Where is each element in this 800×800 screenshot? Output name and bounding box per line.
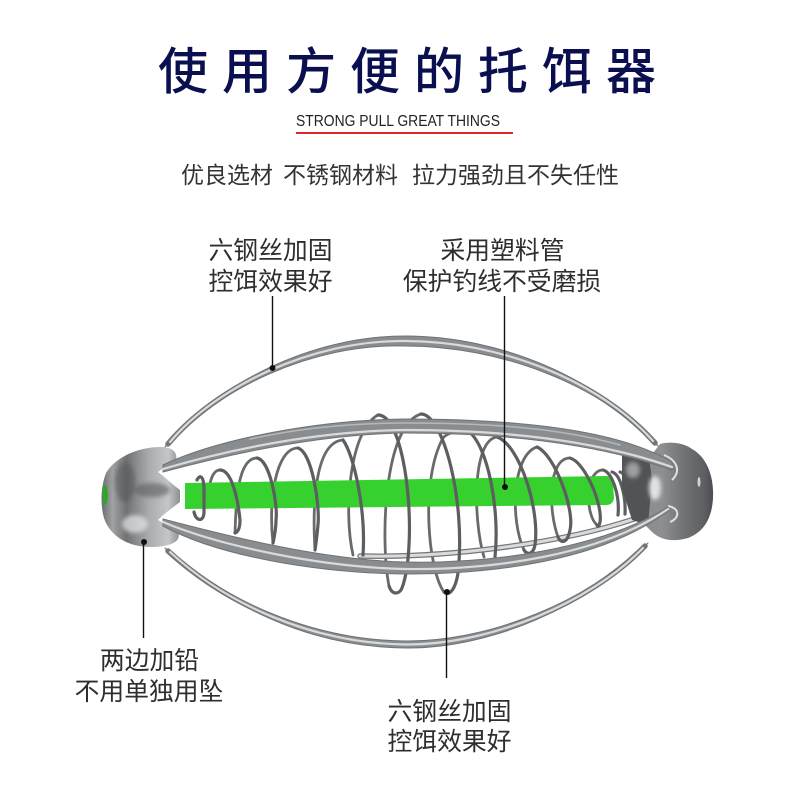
- callout: plastic tube: [403, 237, 601, 490]
- callout: plastic tube: 采用塑料管: [440, 237, 564, 265]
- subtitle: STRONG PULL GREAT THINGS: STRONG PULL GREAT THINGS: [296, 113, 500, 130]
- callout: plastic tube: 保护钓线不受磨损: [403, 268, 601, 296]
- callout: lead ends: 不用单独用坠: [75, 678, 223, 706]
- back lower wire: [360, 517, 640, 556]
- callout: lead ends: [75, 539, 223, 706]
- callout: top left: [208, 237, 332, 371]
- tagline: 拉力强劲且不失任性: [412, 162, 619, 188]
- green plastic tube: [185, 476, 614, 509]
- tagline: 不锈钢材料: [283, 162, 398, 188]
- callout: top left: 六钢丝加固: [208, 237, 332, 265]
- callout: bottom: [388, 589, 512, 756]
- tagline: 优良选材: [181, 162, 273, 188]
- callout: bottom: 六钢丝加固: [388, 698, 512, 726]
- title: 使用方便的托饵器: [158, 44, 670, 100]
- product illustration: bait cage: [102, 336, 713, 648]
- right lead sinker: [622, 443, 713, 540]
- back spring coils: [209, 414, 603, 592]
- callout: lead ends: 两边加铅: [100, 647, 199, 675]
- green tube end: [102, 485, 108, 505]
- left lead sinker: [102, 447, 180, 547]
- callout: top left: 控饵效果好: [208, 268, 332, 296]
- outer and inner wire frame: [163, 336, 672, 648]
- callout: bottom: 控饵效果好: [388, 728, 512, 756]
- front spring coils: [194, 414, 631, 593]
